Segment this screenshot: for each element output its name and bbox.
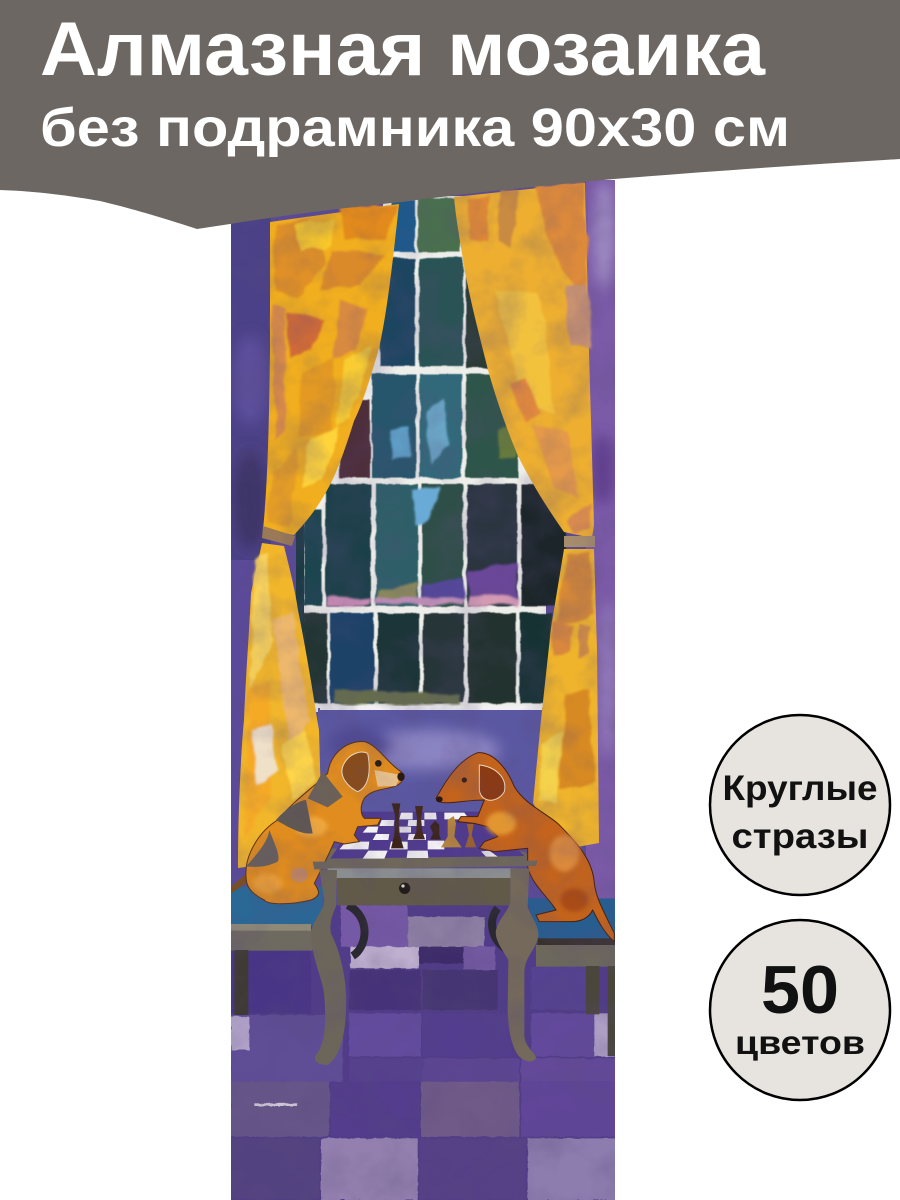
floor tiles	[231, 905, 616, 1200]
left dog tail	[231, 875, 246, 893]
header banner	[0, 0, 900, 229]
chess pieces	[391, 803, 476, 848]
left dog muzzle	[374, 770, 401, 787]
title: Алмазная мозаика	[40, 7, 766, 92]
left curtain	[238, 204, 399, 868]
right dog ear	[479, 765, 505, 800]
curtain tieback	[564, 536, 595, 547]
right curtain	[454, 183, 599, 850]
back wall under the window	[318, 706, 542, 812]
badge: round rhinestones: Круглые	[722, 769, 878, 808]
right bench	[526, 898, 616, 1056]
curtain colour washes	[468, 183, 595, 805]
table apron	[328, 868, 518, 879]
pane light reflections	[326, 400, 517, 704]
badge: 50 colours: цветов	[735, 1024, 865, 1061]
lower left curtain drape	[238, 543, 321, 868]
drawer knob	[399, 883, 410, 894]
left dog ear	[342, 752, 369, 792]
painting: dachshunds playing chess by a window	[231, 180, 616, 1200]
pawn	[465, 824, 476, 847]
wall background	[231, 180, 615, 905]
badge: 50 colours	[710, 920, 890, 1100]
badge: round rhinestones	[710, 715, 890, 895]
lower scene: floor, benches, dogs, table and chess set	[231, 741, 616, 1200]
golden bishop	[441, 816, 462, 847]
dark knight	[430, 821, 441, 839]
badge: 50 colours: 50	[761, 952, 839, 1028]
left dog	[231, 741, 405, 904]
right dog	[436, 753, 614, 942]
badge: round rhinestones: стразы	[732, 817, 868, 856]
curtain tieback	[262, 526, 295, 546]
left table leg	[311, 870, 346, 1065]
back stretchers of table	[348, 905, 508, 956]
window	[296, 196, 566, 712]
lower right curtain drape	[533, 549, 599, 850]
right dog highlights	[549, 835, 579, 872]
watercolour mottling	[231, 180, 615, 1200]
dark queen	[413, 806, 425, 839]
left bench	[231, 887, 323, 1015]
subtitle: без подрамника 90х30 см	[40, 98, 790, 158]
left dog grey patches	[246, 830, 279, 867]
king	[391, 803, 404, 848]
left dog shading	[294, 817, 328, 837]
table top and chess board	[313, 812, 538, 869]
table front	[311, 861, 538, 1065]
lower tiles	[231, 1082, 329, 1137]
window panes	[303, 198, 566, 703]
right table leg	[496, 868, 538, 1061]
curtain colour washes	[244, 205, 398, 840]
